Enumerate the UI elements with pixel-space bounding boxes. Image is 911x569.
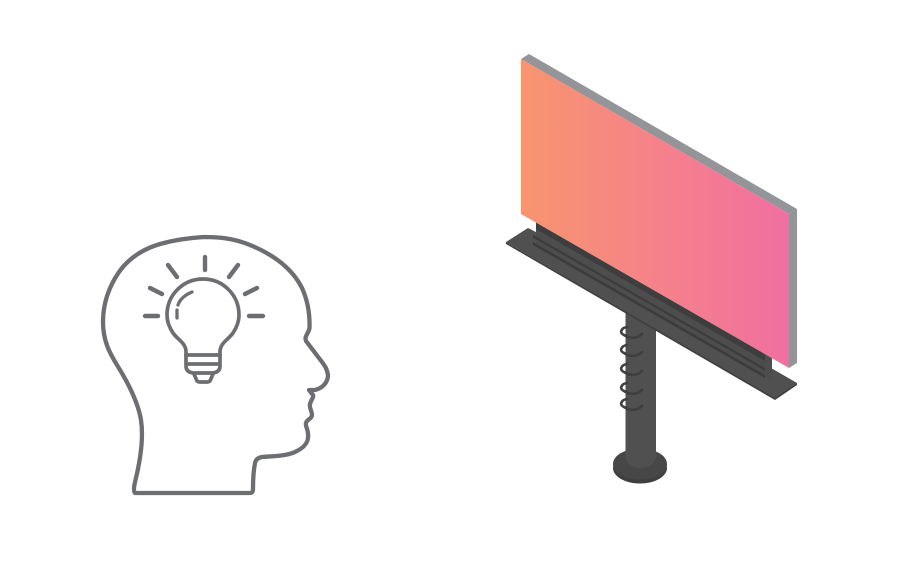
bulb highlight <box>177 292 192 318</box>
illustration: billboard <box>506 54 797 484</box>
bulb base <box>186 355 220 382</box>
billboard supports <box>533 220 772 380</box>
base plate <box>613 448 667 484</box>
pole <box>626 310 656 468</box>
platform <box>506 228 797 399</box>
pole cable coils <box>621 327 642 410</box>
billboard face <box>521 59 789 368</box>
head outline <box>103 237 328 493</box>
light rays <box>145 257 263 316</box>
billboard top edge <box>521 54 797 214</box>
billboard side edge <box>789 209 797 368</box>
icon: head with light bulb <box>103 237 328 493</box>
bulb glass <box>167 279 239 356</box>
